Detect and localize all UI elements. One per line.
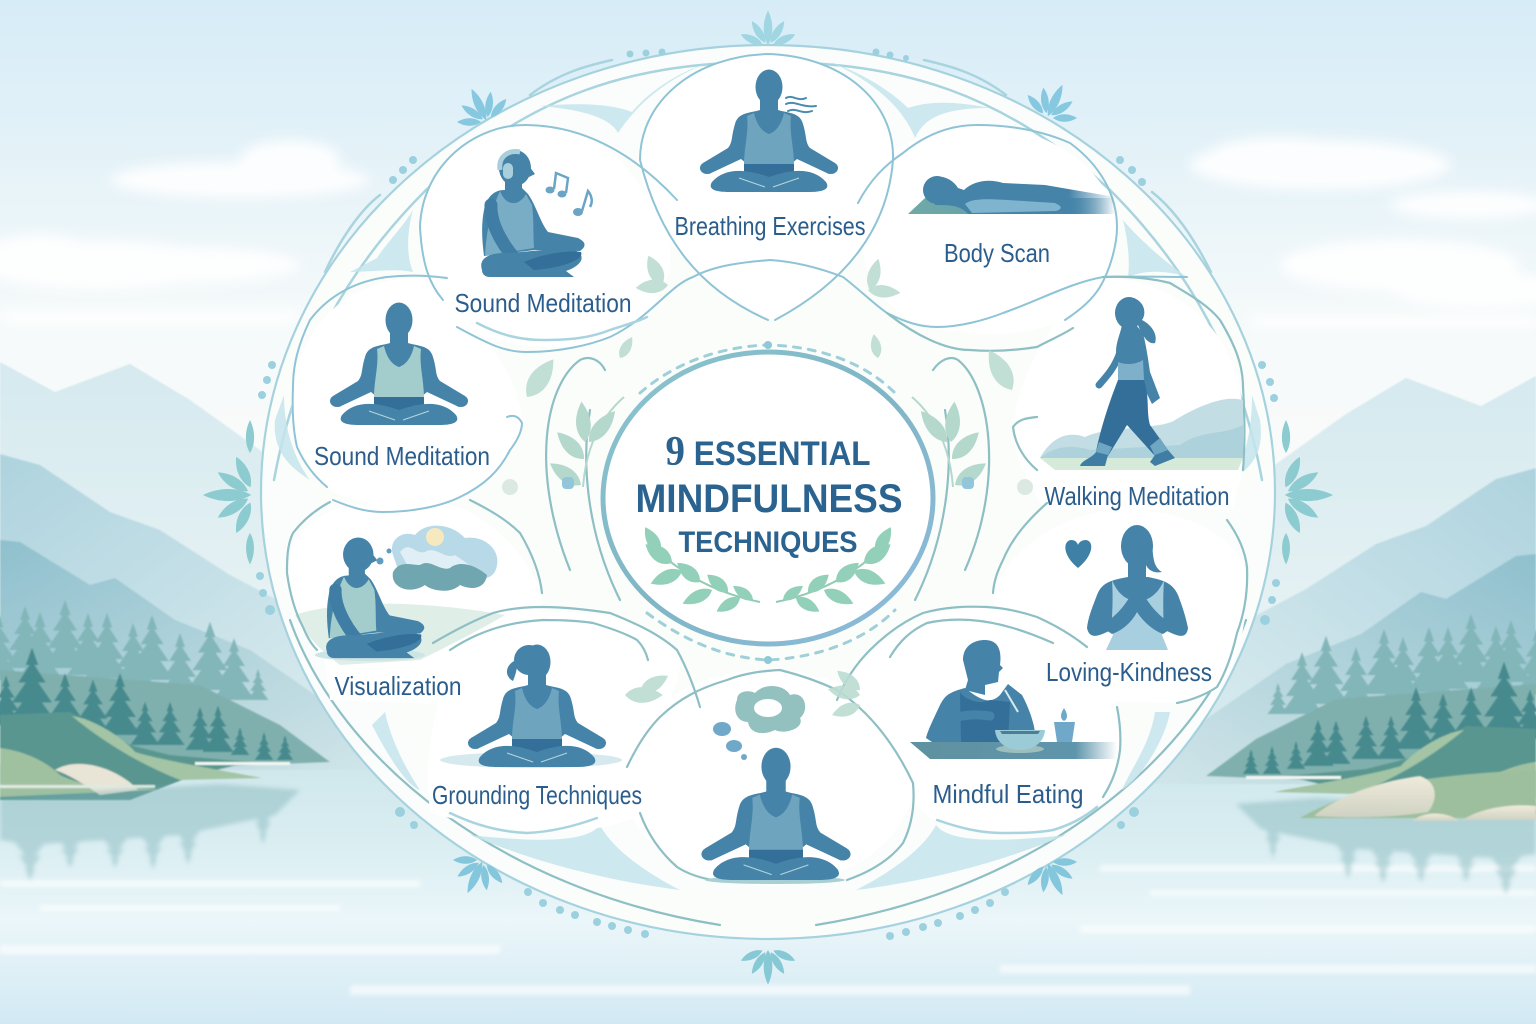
lake [0, 765, 1536, 1024]
label: grounding techniques: Grounding Techniques [432, 780, 642, 810]
label: breathing exercises: Breathing Exercises [674, 211, 866, 241]
panel: grounding techniques [428, 611, 680, 832]
visualization hill [295, 604, 505, 665]
panel: sound meditation left [292, 277, 522, 505]
left landscape: mountains, forest, shore [0, 362, 430, 881]
figure: sound meditation upper [481, 150, 592, 277]
leaf burst: right [1281, 455, 1333, 535]
leaf burst: left [203, 455, 255, 535]
right shore rocks [1300, 770, 1536, 821]
leaf burst: upper right [1021, 73, 1089, 131]
icon: headphones [500, 152, 520, 170]
leaf burst: bottom [739, 947, 797, 984]
corner fills [275, 62, 1261, 890]
figure: visualization [315, 526, 497, 661]
icon: breath waves [786, 97, 816, 112]
label: body scan: Body Scan [944, 238, 1050, 268]
panel: visualization [287, 500, 542, 705]
icon: thought dots [386, 548, 392, 554]
leaf burst: lower right [1021, 849, 1089, 907]
icon: thought cloud [392, 526, 497, 591]
outer ornament: ring, corner fills, dots [256, 45, 1280, 940]
panel: mindful eating [838, 608, 1120, 833]
leaf burst: lower left [441, 847, 509, 905]
figure: bottom meditation [701, 686, 851, 884]
title medallion [546, 341, 989, 664]
icon: thought cloud [735, 686, 805, 733]
panel: sound meditation upper [420, 125, 670, 347]
icon: thought dots [713, 722, 747, 760]
laurel [640, 524, 896, 616]
figure: sound meditation left [330, 302, 468, 425]
lake highlights [0, 865, 1536, 995]
figure: mindful eating [910, 640, 1117, 759]
panel: body scan [858, 125, 1117, 334]
figure: body scan [908, 176, 1115, 214]
right leaf sprig [912, 397, 1033, 495]
label: sound meditation upper: Sound Meditation [454, 288, 632, 318]
panel: bottom meditation [622, 670, 914, 886]
title: line 2: MINDFULNESS [636, 477, 902, 521]
leaf burst: top [739, 10, 797, 48]
clouds [0, 137, 1536, 329]
main disc background [261, 45, 1275, 939]
figure: walking meditation [1040, 297, 1243, 470]
title: line 3: TECHNIQUES [678, 526, 858, 559]
panel: breathing exercises [640, 54, 893, 320]
label: sound meditation left: Sound Meditation [314, 441, 490, 471]
weaving strokes [287, 54, 1247, 880]
title: line 1: 9 ESSENTIAL [666, 429, 870, 475]
panel: walking meditation [1013, 277, 1244, 510]
icon: thought dots [376, 558, 384, 564]
figure: grounding techniques [440, 644, 622, 768]
label: walking meditation: Walking Meditation [1044, 481, 1230, 511]
green leaf accents [519, 253, 1020, 721]
leaf burst: upper left [445, 77, 513, 135]
figure: breathing exercises [700, 70, 838, 192]
leaves: right side upper and lower [1282, 420, 1290, 564]
left leaf sprig [502, 397, 624, 495]
leaves: left side upper and lower [246, 420, 254, 564]
icon: music notes [546, 173, 592, 216]
label: visualization: Visualization [334, 671, 462, 701]
figure: loving-kindness [1087, 525, 1188, 650]
icon: heart [1065, 540, 1091, 568]
label: mindful eating: Mindful Eating [932, 779, 1084, 809]
label: loving-kindness: Loving-Kindness [1046, 657, 1212, 687]
panel: loving-kindness [993, 510, 1247, 703]
right landscape: mountains, forest, shore [1106, 376, 1536, 895]
